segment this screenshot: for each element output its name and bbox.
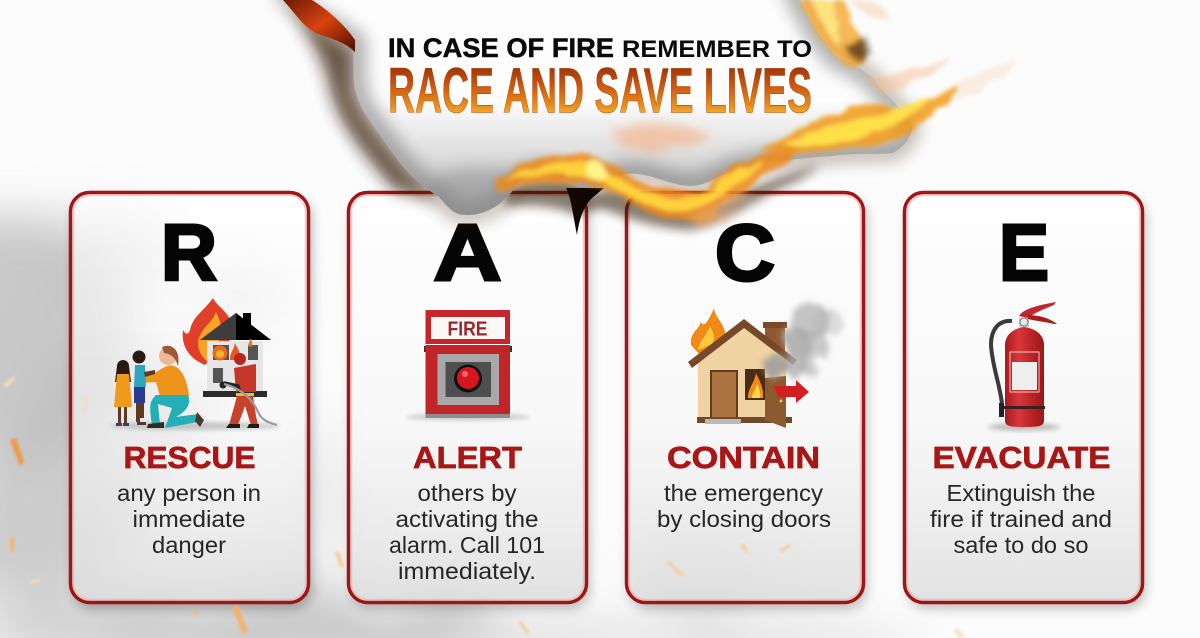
letter E: E	[999, 208, 1049, 297]
text: alert description	[389, 480, 545, 584]
title: IN CASE OF FIRE	[388, 33, 614, 63]
text: alert description: activating the	[396, 506, 538, 532]
text: evacuate description	[930, 480, 1112, 558]
letter R: R	[161, 208, 217, 297]
panel: R card	[70, 192, 308, 602]
burnt paper tear with flames	[280, 0, 1020, 235]
icon: family rescued from burning house	[110, 298, 280, 430]
icon: house with closed door and smoke	[688, 302, 842, 428]
soft shadow around the tear	[283, 0, 912, 215]
heading ALERT: ALERT	[413, 440, 522, 475]
heading RESCUE: RESCUE	[124, 440, 256, 475]
text: alert description: immediately.	[398, 558, 536, 584]
panel: E card	[904, 192, 1142, 602]
burnt curl top left	[283, 0, 355, 52]
text: evacuate description: safe to do so	[954, 532, 1088, 558]
icon: fire alarm: FIRE	[448, 318, 488, 340]
embers	[3, 376, 966, 638]
text: rescue description: any person in	[117, 480, 261, 506]
flame: center	[497, 123, 800, 226]
grey shading inside the tear edge	[280, 0, 920, 223]
heading CONTAIN: CONTAIN	[667, 440, 820, 475]
text: contain description: the emergency	[664, 480, 824, 506]
title: REMEMBER TO	[622, 36, 812, 63]
letter A: A	[434, 208, 502, 297]
letter C: C	[715, 208, 775, 297]
text: evacuate description: Extinguish the	[946, 480, 1096, 506]
text: alert description: alarm. Call 101	[389, 532, 545, 558]
text: rescue description: danger	[152, 532, 226, 558]
text: rescue description	[117, 480, 261, 558]
torn paper	[283, 0, 912, 215]
panel: A card	[348, 192, 586, 602]
icon: fire alarm	[406, 310, 530, 420]
text: alert description: others by	[418, 480, 517, 506]
text: rescue description: immediate	[132, 506, 246, 532]
flame: right streak	[760, 58, 1020, 156]
title	[388, 33, 812, 126]
text: contain description	[657, 480, 831, 532]
black drip	[566, 188, 604, 235]
title: RACE AND SAVE LIVES	[388, 54, 812, 126]
text: evacuate description: fire if trained and	[930, 506, 1112, 532]
heading EVACUATE: EVACUATE	[932, 440, 1110, 475]
scorch shadow around the left side	[290, 0, 440, 200]
flame: top right	[800, 0, 890, 65]
dark burn under the lower edge	[505, 165, 820, 230]
panel: C card	[626, 192, 864, 602]
icon: fire extinguisher	[988, 302, 1060, 431]
text: contain description: by closing doors	[657, 506, 831, 532]
